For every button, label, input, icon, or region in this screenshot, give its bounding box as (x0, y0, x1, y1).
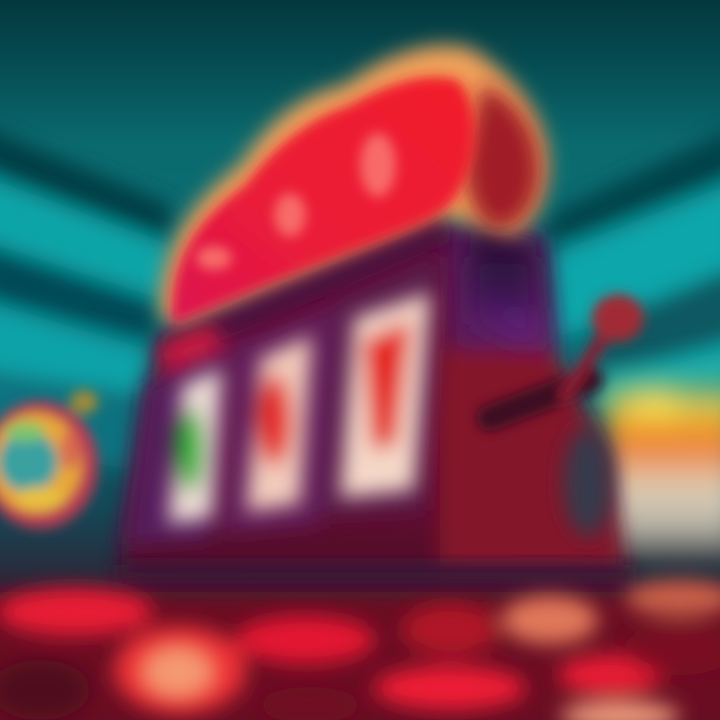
machine body (122, 225, 625, 578)
sign: top marquee (160, 45, 548, 325)
slot machine (120, 45, 644, 591)
reel: middle (246, 335, 312, 512)
background: right rainbow stage (605, 378, 720, 580)
sign underside (160, 205, 455, 365)
reel: right (340, 292, 430, 498)
background: light rays (0, 125, 720, 470)
reel frames (125, 255, 440, 545)
reel: left (168, 368, 222, 524)
base strip (120, 565, 630, 591)
lever (490, 294, 644, 418)
sign lettering glow (196, 133, 396, 270)
foreground dark base (0, 592, 720, 720)
icon: left round wheel sign (0, 390, 98, 529)
foreground: red chips (0, 580, 720, 720)
wheel (564, 428, 612, 536)
